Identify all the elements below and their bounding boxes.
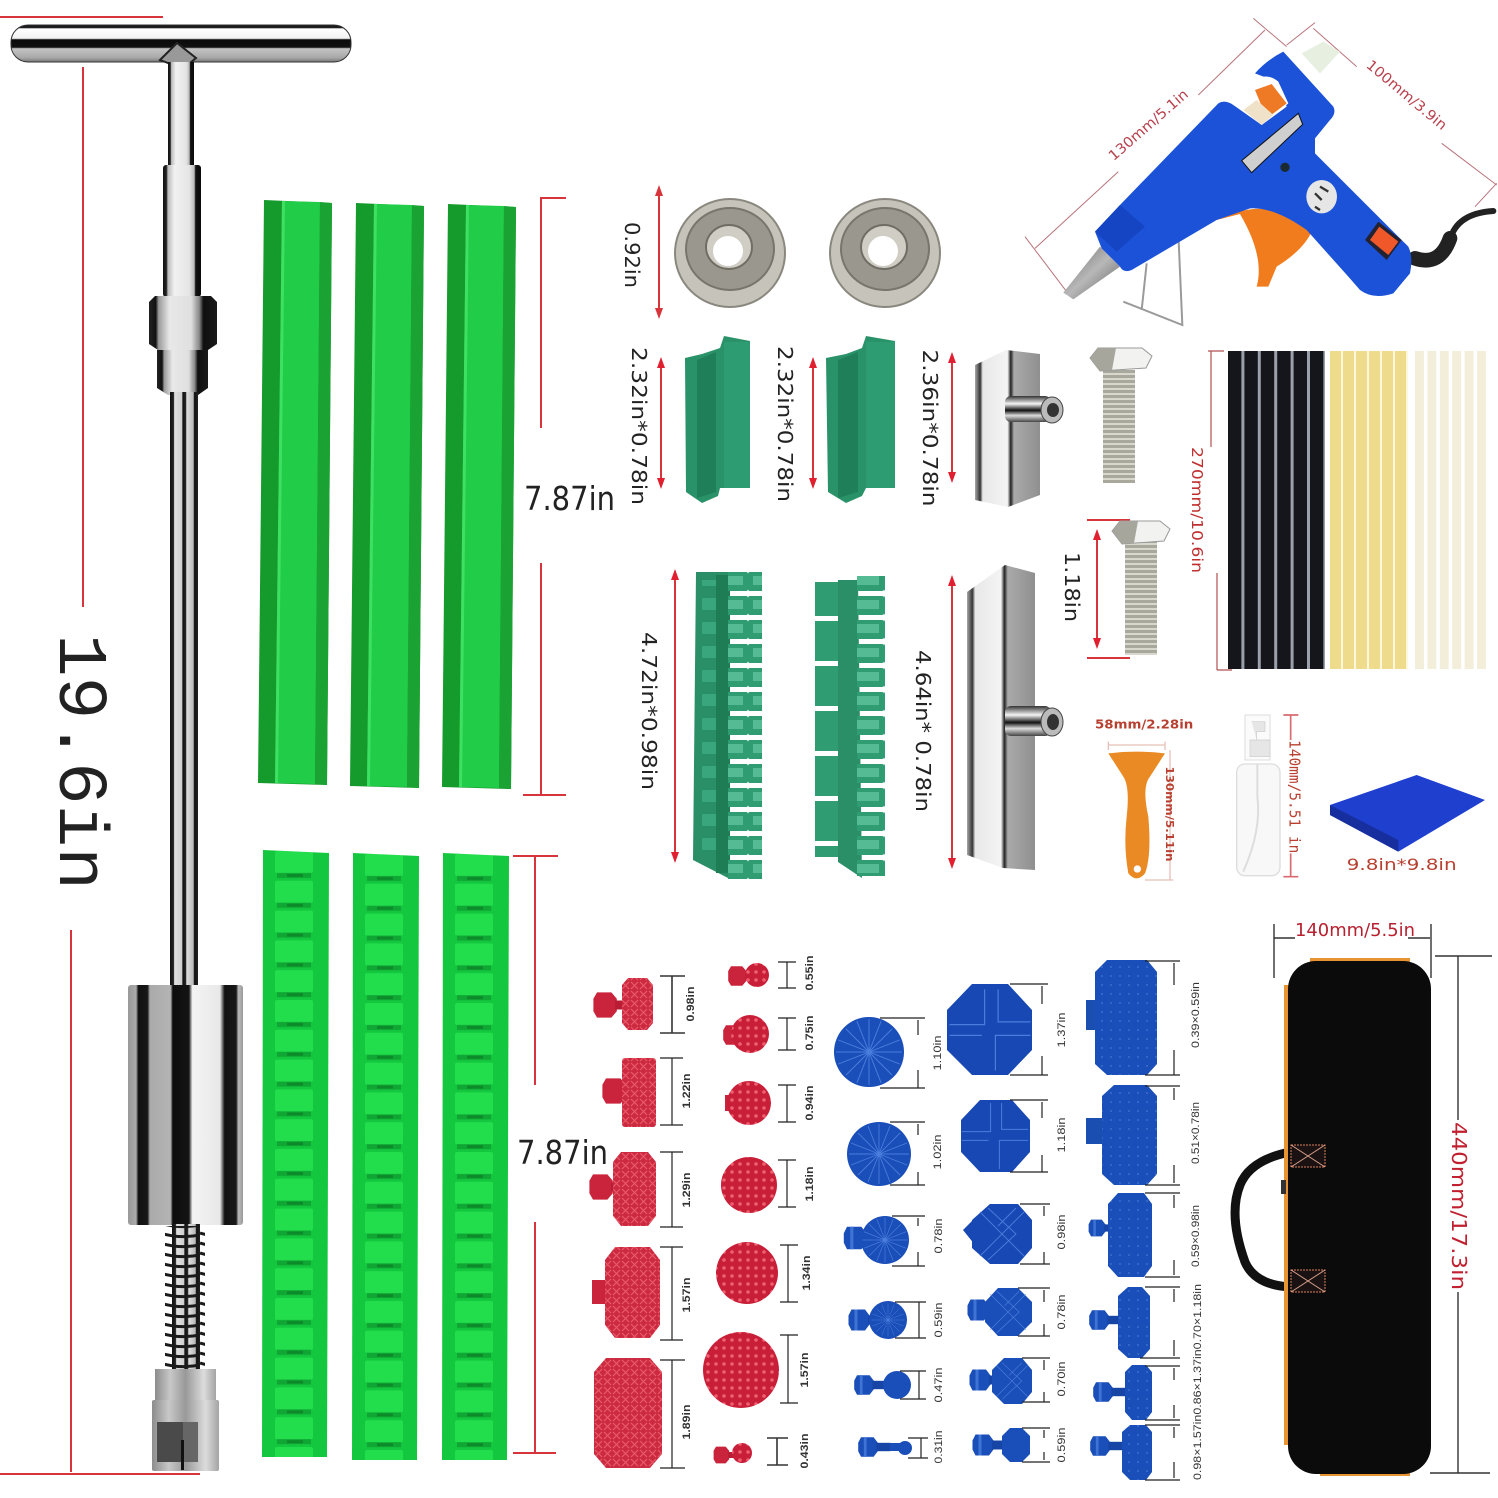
- spray pump: [1250, 722, 1270, 757]
- red tab 1.57in: 1.57in: [681, 1277, 693, 1312]
- T joint: [160, 43, 196, 66]
- red round tab 0.94in: 0.94in: [804, 1085, 816, 1120]
- blue octagon 0.59in: [972, 1428, 1068, 1462]
- blue rect tab 0.51x0.78in: [1086, 1085, 1202, 1185]
- glue sticks with dimension: [1188, 351, 1487, 670]
- power cord: [1415, 211, 1493, 260]
- red round tab 0.55in: [728, 955, 816, 990]
- bottle height lines: [1283, 715, 1298, 877]
- glue sticks with dimension: 270mm/10.6in: [1188, 447, 1206, 573]
- dimension: rails 7.87in upper: [523, 198, 615, 795]
- blue rect tab 0.98x1.57in: [1090, 1425, 1180, 1480]
- icon: bolt upper: [1090, 348, 1152, 483]
- bag body: [1288, 961, 1431, 1474]
- blue rect tab 0.70x1.18in: [1089, 1287, 1180, 1358]
- indicator light: [1280, 163, 1290, 172]
- round badge: [1306, 180, 1337, 213]
- red round tab 0.75in: [723, 1015, 816, 1053]
- icon: long silver block with knob: [967, 565, 1063, 870]
- scraper height label: 130mm/5.11in: [1163, 766, 1176, 861]
- storage bag with dimensions: [1235, 920, 1492, 1476]
- red round tab 0.75in: 0.75in: [804, 1015, 816, 1050]
- icon: short silver block with dimension: [918, 350, 1063, 507]
- red round tab 1.57in: 1.57in: [799, 1352, 811, 1388]
- icon: long green slider 1 with dimension: [637, 569, 762, 880]
- icon: two magnets with dimension: 0.92in: [620, 222, 644, 288]
- gun dimension lines: [1025, 18, 1497, 292]
- red tab 1.29in: [589, 1152, 693, 1227]
- icon: long green slider 1 with dimension: 4.72in*0.98in: [637, 632, 661, 790]
- blue octagon 1.18in: 1.18in: [1056, 1118, 1068, 1152]
- red small tab 0.43in: [714, 1433, 811, 1468]
- long rod: [170, 392, 198, 986]
- icon: blue microfiber towel with label: 9.8in*9.8in: [1347, 855, 1457, 874]
- panel: plain green rails: [258, 200, 516, 789]
- red round tab 1.18in: 1.18in: [804, 1166, 816, 1202]
- bag height dimension: [1430, 956, 1492, 1473]
- dimension: rails 7.87in lower: [513, 856, 608, 1453]
- red tab 1.89in: 1.89in: [681, 1404, 693, 1440]
- red tab 0.98in: 0.98in: [685, 986, 697, 1022]
- panel: toothed green rails: [262, 850, 509, 1460]
- stand wire: [1123, 233, 1182, 325]
- blue tab 1.10in: 1.10in: [932, 1036, 944, 1070]
- red round tab 1.34in: 1.34in: [801, 1255, 813, 1290]
- nozzle shoulder shading: [1095, 205, 1145, 252]
- bag width dimension: [1274, 920, 1431, 978]
- blue rect tab 0.39x0.59in: 0.39×0.59in: [1190, 982, 1202, 1048]
- blue tab 0.78in: [844, 1216, 945, 1266]
- blue octagon 0.98in: [963, 1204, 1068, 1264]
- combined size label: 0.98×1.57in0.86×1.37in0.70×1.18in: [1192, 1284, 1204, 1480]
- bottle body: [1237, 764, 1280, 876]
- icon: spray bottle with dimensions: [1237, 715, 1302, 877]
- panel: blue octagon glue tabs: [947, 984, 1068, 1462]
- red tab 1.22in: [602, 1058, 693, 1127]
- blue octagon 1.18in: [961, 1100, 1068, 1172]
- blue octagon 0.59in: 0.59in: [1056, 1428, 1068, 1462]
- lower collar: [157, 350, 208, 395]
- red round tab 1.18in: [721, 1157, 816, 1213]
- shaft sleeve: [163, 165, 201, 297]
- icon: plastic scraper with dimensions: [1095, 718, 1193, 880]
- blue rect tab 0.86x1.37in: [1093, 1365, 1180, 1420]
- blue octagon 0.98in: 0.98in: [1056, 1214, 1068, 1250]
- panel: blue rectangular glue tabs: [1086, 960, 1204, 1480]
- red round tab 0.94in: [725, 1081, 816, 1125]
- blue octagon 1.37in: [947, 984, 1068, 1075]
- clear glue sticks: [1415, 351, 1487, 669]
- red tab 1.22in: 1.22in: [681, 1073, 693, 1108]
- panel: red glue tabs round column: [703, 955, 816, 1468]
- blue tab 0.47in: [854, 1368, 945, 1402]
- dip tube: [1243, 763, 1258, 872]
- blue octagon 0.70in: [970, 1358, 1068, 1404]
- scraper body: [1108, 752, 1165, 878]
- bag handle: [1235, 1152, 1290, 1287]
- T-handle slide hammer tool: [11, 25, 351, 1471]
- blue tab 0.59in: 0.59in: [933, 1302, 945, 1338]
- collar: [149, 296, 217, 352]
- warning label: [1242, 113, 1303, 173]
- blue octagon 0.78in: 0.78in: [1056, 1294, 1068, 1330]
- blue tab 0.31in: 0.31in: [933, 1430, 945, 1464]
- dimension: tool length 19.6in: 19.6in: [38, 634, 117, 890]
- blue tab 0.78in: 0.78in: [933, 1218, 945, 1254]
- blue octagon 0.70in: 0.70in: [1056, 1362, 1068, 1396]
- icon: bolt lower with dimension: [1060, 520, 1170, 658]
- icon: long green slider 2 with dimension: 4.64in* 0.78in: [911, 650, 935, 812]
- dimension: rails 7.87in upper: 7.87in: [524, 479, 615, 518]
- bag clasp: [1281, 1180, 1286, 1194]
- red round tab 0.55in: 0.55in: [804, 955, 816, 990]
- puller head: [152, 1369, 219, 1471]
- icon: short green slider 2 with dimension: 2.32in*0.78in: [773, 346, 797, 502]
- nozzle: [1063, 247, 1120, 299]
- blue tab 1.02in: [847, 1122, 944, 1186]
- bag width dimension: 140mm/5.5in: [1295, 920, 1415, 941]
- handle patch upper: [1291, 1145, 1325, 1167]
- trigger: [1217, 209, 1312, 287]
- red tab 1.29in: 1.29in: [681, 1172, 693, 1208]
- T-bar handle: [11, 25, 351, 62]
- scraper width label: 58mm/2.28in: [1095, 718, 1193, 732]
- red small tab 0.43in: 0.43in: [799, 1433, 811, 1468]
- red tab 1.89in: [594, 1358, 693, 1468]
- blue rect tab 0.59x0.98in: [1089, 1193, 1202, 1277]
- blue tab 0.59in: [848, 1301, 945, 1339]
- scraper dimension lines: [1108, 742, 1173, 880]
- badge marks: [1315, 187, 1328, 210]
- handle patch lower: [1291, 1270, 1325, 1292]
- icon: short green slider 2 with dimension: [773, 336, 895, 503]
- blue tab 1.02in: 1.02in: [932, 1134, 944, 1170]
- bag orange edges: [1284, 958, 1410, 1476]
- bottle height label: 140mm/5.51 in: [1285, 740, 1302, 853]
- glue stick tip: [1302, 42, 1340, 73]
- red round tab 1.34in: [716, 1242, 813, 1304]
- icon: blue glue gun with dimensions: [1025, 18, 1497, 325]
- red tab 0.98in: [593, 976, 697, 1033]
- blue rect tab 0.59x0.98in: 0.59×0.98in: [1190, 1205, 1202, 1267]
- yellow glue sticks: [1330, 351, 1408, 669]
- gun dimension text 130mm: 130mm/5.1in: [1106, 87, 1192, 164]
- blue tab 1.10in: [834, 1017, 944, 1088]
- upper shaft: [168, 62, 194, 166]
- icon: blue microfiber towel with label: [1330, 775, 1485, 874]
- blue octagon 1.37in: 1.37in: [1056, 1012, 1068, 1048]
- icon: short green slider 1 with dimension: 2.32in*0.78in: [627, 347, 651, 505]
- red round tab 1.57in: [703, 1332, 811, 1408]
- blue tab 0.47in: 0.47in: [933, 1368, 945, 1402]
- icon: bolt lower with dimension: 1.18in: [1060, 552, 1084, 622]
- bottle cap: [1245, 715, 1270, 760]
- dimension: tool length 19.6in: [0, 17, 200, 1474]
- feed window: [1233, 76, 1288, 125]
- spring and inner rod: [165, 1224, 205, 1372]
- blue tab 0.31in: [858, 1430, 945, 1464]
- gun dimension text 100mm: 100mm/3.9in: [1363, 57, 1450, 134]
- gun body: [1095, 52, 1411, 296]
- black glue sticks: [1228, 351, 1325, 669]
- icon: two magnets with dimension: [620, 185, 940, 319]
- panel: blue round glue tabs: [834, 1017, 945, 1464]
- blue rect tab 0.51x0.78in: 0.51×0.78in: [1190, 1102, 1202, 1164]
- dimension: rails 7.87in lower: 7.87in: [517, 1133, 608, 1172]
- red tab 1.57in: [592, 1247, 693, 1340]
- blue octagon 0.78in: [968, 1288, 1068, 1336]
- icon: long green slider 2 with dimension: [815, 575, 956, 878]
- slide hammer cylinder: [128, 985, 243, 1225]
- power switch: [1365, 222, 1402, 260]
- panel: red glue tabs rectangular column: [589, 976, 697, 1468]
- blue rect tab 0.39x0.59in: [1086, 960, 1202, 1075]
- bag height dimension: 440mm/17.3in: [1447, 1122, 1471, 1290]
- icon: short green slider 1 with dimension: [627, 336, 750, 505]
- icon: short silver block with dimension: 2.36in*0.78in: [918, 350, 942, 506]
